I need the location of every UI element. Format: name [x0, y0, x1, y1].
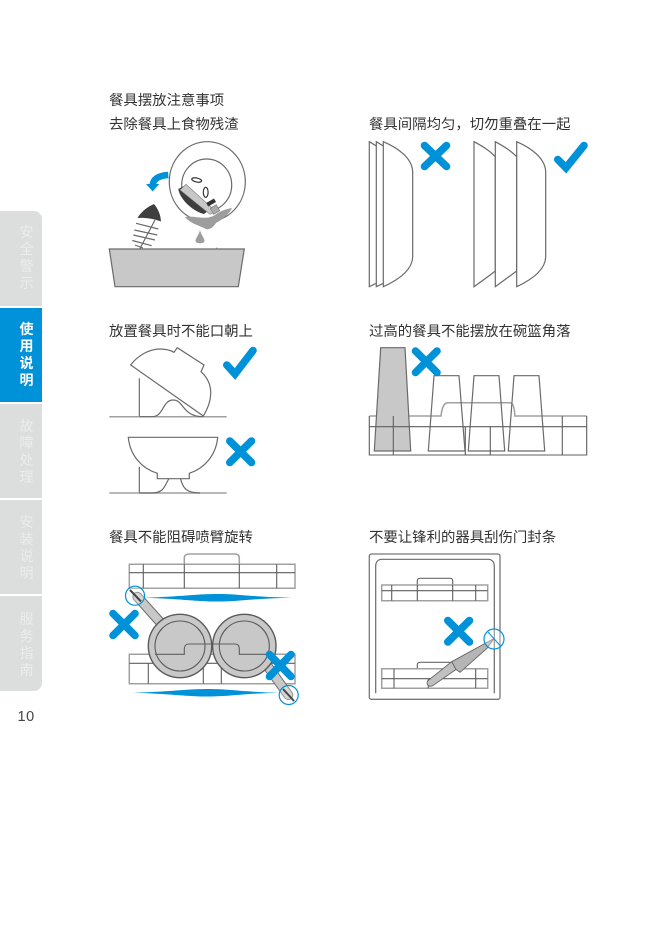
icon: lower rack [129, 654, 295, 684]
tab: service guide [0, 596, 42, 691]
icon: highlight circle top [126, 586, 144, 605]
icon: cross right [270, 654, 291, 676]
icon: cross [416, 351, 437, 372]
panel: do not block spray arm [109, 529, 298, 704]
icon: upright bowl on rack [109, 437, 227, 493]
caption: do not block spray arm: 餐具不能阻碍喷臂旋转 [109, 529, 253, 546]
tab: installation: 装 [20, 531, 34, 547]
icon: dishwasher door outline [369, 554, 500, 699]
tab: safety warnings: 安 [20, 224, 34, 240]
caption: sharp dishes scratch seal: 不要让锋利的器具刮伤门封条 [369, 529, 556, 546]
tab: instructions (active): 使 [20, 321, 34, 337]
panel: tall dishes not in corners [369, 323, 587, 455]
tab: instructions (active): 用 [20, 338, 34, 354]
icon: upper spray arm [143, 594, 292, 602]
tab: installation [0, 500, 42, 594]
icon: cross [448, 620, 470, 642]
icon: check mark [558, 146, 584, 168]
icon: cross left [113, 614, 135, 636]
icon: upper rack [129, 554, 295, 588]
icon: tilted bowl on rack [109, 348, 227, 417]
icon: plates stacked too closely [369, 142, 413, 287]
icon: cross [424, 146, 446, 166]
icon: rack with dishes [369, 348, 587, 455]
tab: installation: 说 [20, 548, 34, 564]
caption: space plates evenly: 餐具间隔均匀，切勿重叠在一起 [369, 116, 570, 133]
icon: knife [427, 638, 494, 686]
icon: grey basin [109, 249, 244, 287]
caption: remove food scraps: 去除餐具上食物残渣 [109, 116, 239, 133]
icon: cross [230, 441, 252, 462]
tab: troubleshooting: 理 [20, 469, 34, 485]
tab: installation: 明 [20, 565, 34, 581]
panel: do not place dishes facing up [109, 323, 253, 493]
tab: instructions (active): 说 [20, 355, 34, 371]
tab: safety warnings: 全 [20, 241, 34, 257]
icon: check mark [227, 350, 253, 374]
tab: troubleshooting: 故 [20, 418, 34, 434]
tab: instructions (active): 明 [20, 372, 34, 388]
tab: service guide: 服 [20, 611, 34, 627]
icon: plates evenly spaced [474, 142, 546, 287]
tab: installation: 安 [20, 514, 34, 530]
panel: sharp dishes scratch door seal [369, 529, 556, 699]
panel: remove food scraps [109, 116, 245, 287]
sidebar navigation [0, 211, 42, 691]
tab: service guide: 南 [20, 662, 34, 678]
icon: lower rack [382, 662, 488, 688]
arrow: curved blue [146, 175, 168, 192]
icon: highlight circle [484, 629, 504, 649]
tab: troubleshooting: 障 [20, 435, 34, 451]
icon: fish bone [132, 204, 161, 248]
panel: space plates evenly [369, 116, 584, 287]
main heading: 餐具摆放注意事项 [109, 91, 224, 109]
page number: 10 [18, 709, 35, 725]
tab: service guide: 务 [20, 628, 34, 644]
tab: safety warnings: 示 [20, 275, 34, 291]
icon: upper rack [382, 578, 488, 601]
tab: safety warnings [0, 211, 42, 306]
caption: do not place facing up: 放置餐具时不能口朝上 [109, 323, 253, 340]
tab: safety warnings: 警 [20, 258, 34, 274]
icon: pans blocking spray arm [137, 597, 288, 695]
tab: troubleshooting [0, 404, 42, 498]
tab: troubleshooting: 处 [20, 452, 34, 468]
tab: service guide: 指 [20, 645, 34, 661]
tab: instructions (active) [0, 308, 42, 402]
caption: tall dishes not in corners: 过高的餐具不能摆放在碗篮角落 [369, 323, 570, 340]
icon: highlight circle bottom [279, 686, 298, 704]
icon: lower spray arm [133, 689, 278, 696]
icon: plate with food scraps [169, 142, 245, 249]
